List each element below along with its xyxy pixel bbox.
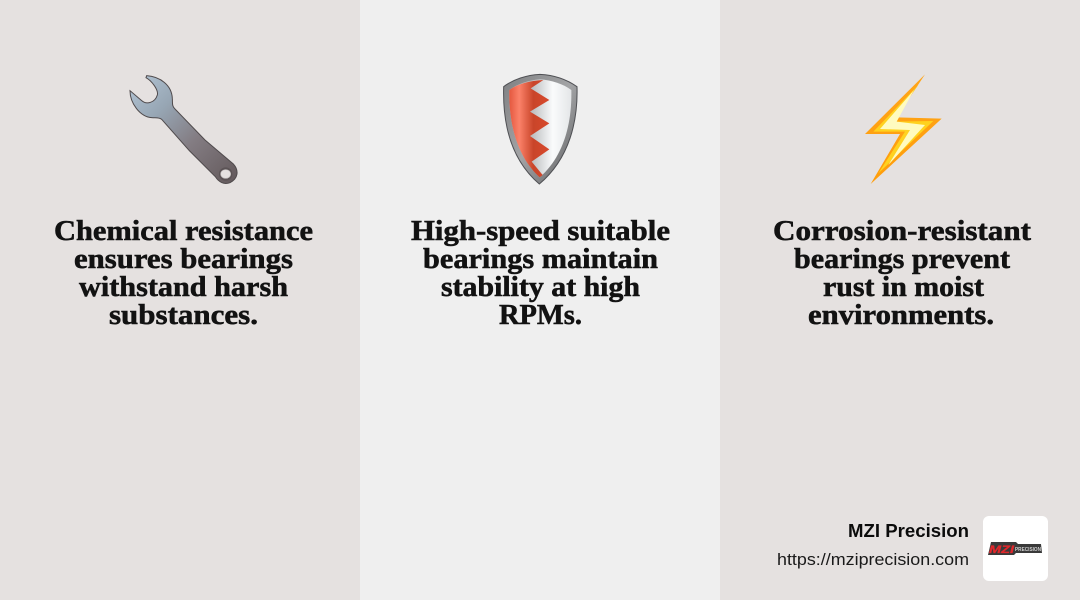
panel: corrosion resistance bbox=[720, 0, 1080, 600]
heading: high-speed: stability at high bbox=[441, 271, 640, 303]
icon: lightning bolt bbox=[865, 74, 942, 184]
heading: corrosion resistance: environments. bbox=[808, 299, 994, 331]
icon: wrench bbox=[130, 76, 237, 183]
brand url: https://mziprecision.com bbox=[777, 551, 969, 569]
logo bbox=[983, 516, 1048, 581]
icon: shield bbox=[504, 74, 577, 184]
heading: high-speed: High-speed suitable bbox=[411, 215, 670, 247]
heading: corrosion resistance: bearings prevent bbox=[794, 243, 1010, 275]
heading: chemical resistance: substances. bbox=[109, 299, 258, 331]
logo: MZI bbox=[989, 544, 1015, 556]
heading: chemical resistance: Chemical resistance bbox=[54, 215, 313, 247]
logo: PRECISION bbox=[1015, 547, 1041, 553]
footer: brand bbox=[777, 516, 1048, 581]
brand name: MZI Precision bbox=[848, 521, 969, 541]
panel: high-speed bbox=[360, 0, 720, 600]
heading: high-speed: bearings maintain bbox=[423, 243, 658, 275]
panel: chemical resistance bbox=[0, 0, 360, 600]
heading: corrosion resistance: rust in moist bbox=[823, 271, 984, 303]
heading: corrosion resistance: Corrosion-resistant bbox=[773, 215, 1031, 247]
heading: high-speed: RPMs. bbox=[499, 299, 582, 331]
heading: chemical resistance: ensures bearings bbox=[74, 243, 293, 275]
heading: chemical resistance: withstand harsh bbox=[79, 271, 288, 303]
